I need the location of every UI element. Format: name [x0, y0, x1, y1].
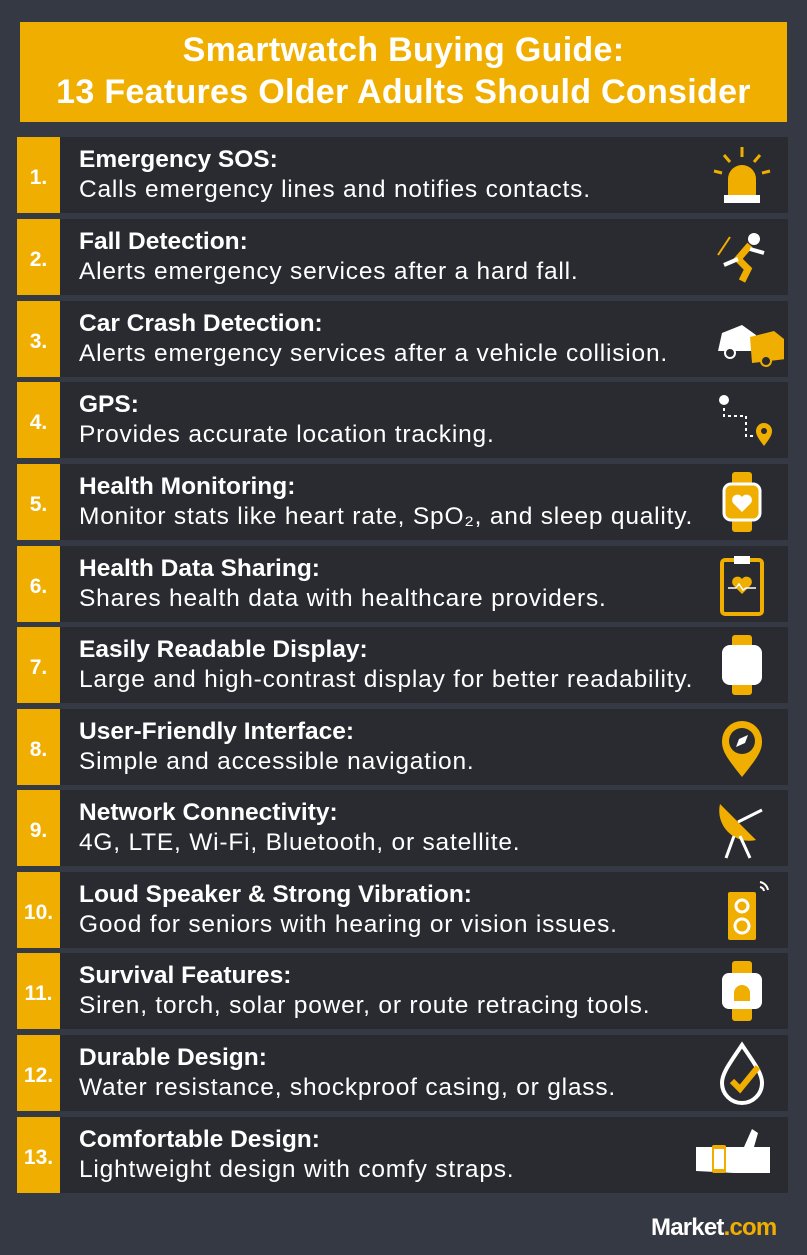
row 2: Fall Detection: 2. [30, 248, 47, 271]
icon: siren [714, 147, 770, 203]
row 7: Easily Readable Display: Large and high-contrast display for better readability. [79, 666, 693, 693]
row 6: Health Data Sharing: 6. [30, 575, 47, 598]
icon: glowing watch [722, 635, 762, 695]
row 11: Survival Features: 11. [24, 982, 53, 1005]
row 2: Fall Detection: Alerts emergency services after a hard fall. [79, 258, 579, 285]
icon: falling person [717, 233, 764, 283]
row 10: Loud Speaker: Good for seniors with hearing or vision issues. [79, 911, 618, 938]
icon: crashed cars [718, 325, 784, 367]
row 8: User-Friendly Interface: Simple and accessible navigation. [79, 748, 474, 775]
icon: water drop check [720, 1042, 764, 1105]
row 11: Survival Features: Survival Features: [79, 962, 291, 989]
row 12: Durable Design [17, 1035, 788, 1111]
row 9: Network Connectivity [17, 790, 788, 866]
title: Smartwatch Buying Guide: [183, 31, 624, 69]
icon: watch siren [722, 961, 762, 1021]
row 3: Car Crash Detection: Car Crash Detection: [79, 310, 323, 337]
row 5: Health Monitoring: Monitor stats like heart rate, SpO₂, and sleep quality. [79, 503, 693, 530]
row 11: Survival Features: Siren, torch, solar power, or route retracing tools. [79, 992, 650, 1019]
row 6: Health Data Sharing [17, 546, 788, 622]
row 2: Fall Detection [17, 219, 788, 295]
row 4: GPS: GPS: [79, 391, 139, 418]
title: 13 Features Older Adults Should Consider [56, 73, 751, 111]
row 7: Easily Readable Display: Easily Readable Display: [79, 636, 368, 663]
row 4: GPS: Provides accurate location tracking. [79, 421, 495, 448]
row 9: Network Connectivity: 4G, LTE, Wi-Fi, Bluetooth, or satellite. [79, 829, 520, 856]
row 8: User-Friendly Interface: 8. [30, 738, 47, 761]
row 13: Comfortable Design: Lightweight design with comfy straps. [79, 1156, 514, 1183]
row 4: GPS: 4. [30, 411, 47, 434]
row 7: Easily Readable Display [17, 627, 788, 703]
row 5: Health Monitoring: 5. [30, 493, 47, 516]
row 6: Health Data Sharing: Health Data Sharing: [79, 555, 320, 582]
row 1: Emergency SOS [17, 137, 788, 213]
row 7: Easily Readable Display: 7. [30, 656, 47, 679]
icon: compass pin [722, 721, 762, 777]
row 4: GPS [17, 382, 788, 458]
row 3: Car Crash Detection: Alerts emergency services after a vehicle collision. [79, 340, 668, 367]
icon: speaker [728, 881, 769, 940]
row 12: Durable Design: 12. [24, 1064, 53, 1087]
row 6: Health Data Sharing: Shares health data with healthcare providers. [79, 585, 607, 612]
icon: route pin [719, 395, 772, 446]
row 13: Comfortable Design: 13. [24, 1146, 53, 1169]
title [20, 22, 787, 122]
row 5: Health Monitoring [17, 464, 788, 540]
row 5: Health Monitoring: Health Monitoring: [79, 473, 295, 500]
row 8: User-Friendly Interface: User-Friendly Interface: [79, 718, 354, 745]
icon: watch heart [722, 472, 762, 532]
icon: thumbs up watch [696, 1129, 770, 1173]
row 9: Network Connectivity: 9. [30, 819, 47, 842]
row 8: User-Friendly Interface [17, 709, 788, 785]
row 13: Comfortable Design [17, 1117, 788, 1193]
row 9: Network Connectivity: Network Connectivity: [79, 799, 338, 826]
row 3: Car Crash Detection: 3. [30, 330, 47, 353]
row 10: Loud Speaker [17, 872, 788, 948]
logo: Market.com [651, 1214, 776, 1241]
row 1: Emergency SOS: Emergency SOS: [79, 146, 278, 173]
row 1: Emergency SOS: Calls emergency lines and notifies contacts. [79, 176, 591, 203]
row 3: Car Crash Detection [17, 301, 788, 377]
icon: clipboard [720, 556, 764, 616]
row 12: Durable Design: Water resistance, shockproof casing, or glass. [79, 1074, 616, 1101]
icon: satellite dish [719, 804, 763, 859]
row 10: Loud Speaker: 10. [24, 901, 53, 924]
row 13: Comfortable Design: Comfortable Design: [79, 1126, 320, 1153]
row 11: Survival Features [17, 953, 788, 1029]
row 1: Emergency SOS: 1. [30, 166, 47, 189]
row 12: Durable Design: Durable Design: [79, 1044, 267, 1071]
row 2: Fall Detection: Fall Detection: [79, 228, 248, 255]
row 10: Loud Speaker: Loud Speaker & Strong Vibration: [79, 881, 472, 908]
